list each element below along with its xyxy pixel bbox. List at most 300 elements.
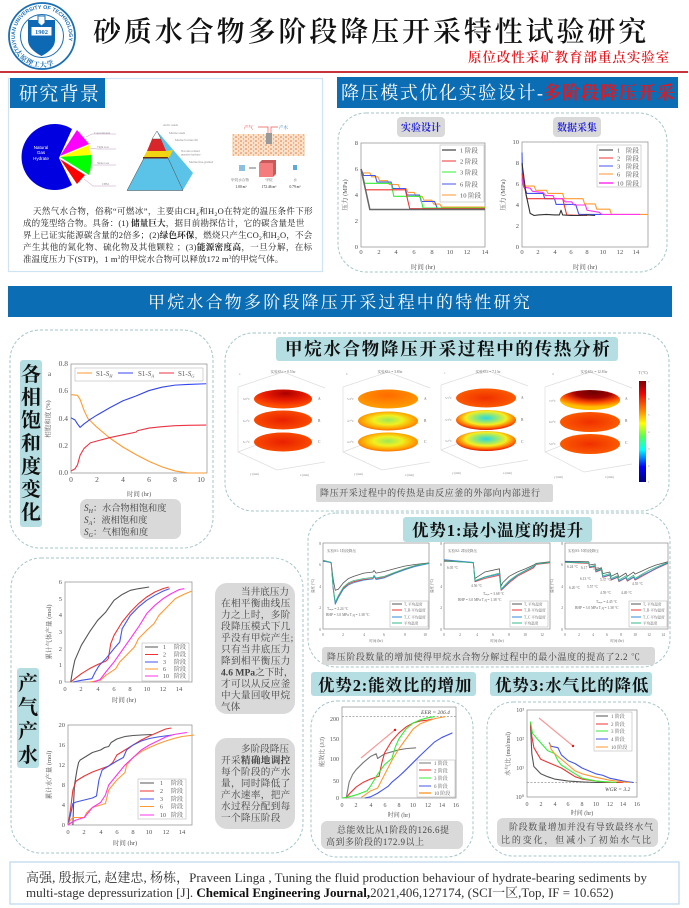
text block: background description: 成的笼型络合物。具备：(1) 储量巨大，据目前勘探估计，它的碳含量是世 (23, 218, 305, 229)
line chart: EER: 16 (453, 803, 459, 809)
legend: measured pressure: 阶段 (626, 162, 640, 170)
line chart: 1-stage temperature: 4 (319, 585, 321, 589)
legend: temperature a: Tₐ 平均温度 (404, 602, 423, 606)
legend: temperature a (390, 601, 428, 627)
legend: WGR: 1 阶段 (611, 713, 625, 720)
heat map d: 实验S3 t = 12.8 hr (581, 369, 608, 374)
line chart: 10-stage temperature: 12 (647, 633, 651, 637)
heading: research background: 研究背景 (19, 83, 100, 105)
line chart: WGR: 2 (540, 802, 542, 808)
heat map c: B (521, 418, 524, 422)
line chart: measured pressure: 4 (553, 249, 557, 256)
heat map c: 5.5°C (445, 396, 452, 400)
heat map b: x (mm) (405, 473, 414, 477)
color bar: temperature: 3 (648, 447, 650, 451)
line chart: EER: 14 (439, 803, 445, 809)
legend: EER (417, 760, 455, 797)
heat map a: 6.1°C (243, 440, 250, 444)
line chart: 10-stage temperature: 10 (633, 633, 637, 637)
note: gas production threshold: 只有当井底压力 (221, 644, 291, 656)
line chart: WGR: WGR = 3.2 (605, 787, 630, 793)
line chart: saturation vs time: 0.8 (59, 359, 68, 368)
line chart: 2-stage temperature (429, 542, 550, 643)
line chart: 2-stage temperature: 时间 (hr) (490, 638, 505, 643)
heat map c: 实验S3 t = 7.1 hr (475, 369, 501, 374)
note: gas production threshold: 降到相平衡压力 (221, 655, 291, 667)
legend: measured pressure: 3 (617, 164, 620, 170)
line chart: measured pressure: 10 (512, 139, 519, 146)
heat map a: 6.2°C (243, 419, 250, 423)
line chart: cumulative gas: 2 (59, 646, 62, 653)
panel: heat transfer analysis (225, 333, 669, 511)
line chart: 2-stage temperature: 2 (459, 633, 461, 637)
heat map c: 3.2°C (445, 439, 452, 443)
line chart: designed pressure: 14 (482, 249, 489, 256)
legend: temperature b: T_B 平均温度 (524, 608, 546, 612)
line chart: 2-stage temperature: 8 (440, 542, 442, 546)
heading: phase saturation change: 各 (21, 363, 41, 386)
heading: advantage 1: 优势1:最小温度的提升 (412, 520, 584, 540)
legend: gas (142, 643, 189, 681)
line chart: cumulative gas: 0 (59, 679, 62, 686)
legend: designed pressure (440, 145, 484, 202)
line chart: designed pressure: 0 (355, 244, 358, 251)
logo: Taiyuan University of Technology: TAIYUAN UNIVERSITY OF TECHNOLOGY (11, 5, 73, 52)
legend: EER: 3 阶段 (434, 775, 448, 782)
logo: Taiyuan University of Technology: 1902 (35, 29, 48, 36)
heading: depressurization design: 降压模式优化实验设计 (341, 83, 537, 103)
legend: water: 1 (160, 781, 163, 787)
caption: heat transfer (316, 484, 553, 502)
note: saturation symbols (80, 499, 181, 539)
line chart: designed pressure: 12 (464, 249, 470, 256)
heading: gas and water production: 水 (18, 744, 38, 767)
legend: gas: 3 (163, 660, 166, 666)
line chart: saturation vs time (43, 359, 207, 498)
heat map d: d (552, 372, 554, 376)
line chart: saturation vs time: 6 (147, 475, 151, 484)
pie chart: gas resources: Gas (37, 150, 46, 155)
line chart: 10-stage temperature: 6.20 °C (569, 586, 581, 590)
line chart: EER: 100 (330, 757, 339, 763)
heat map b: b (346, 372, 348, 376)
line chart: 10-stage temperature: 4 (592, 633, 594, 637)
line chart: 2-stage temperature: 6 (492, 633, 494, 637)
text block: background description: 产生其他的氮化物、硫化物及其他颗粒 ；(3)能源密度高，一旦分解，在标 (23, 242, 313, 253)
legend: gas: 阶段 (174, 665, 186, 673)
line chart: WGR: 10² (516, 737, 524, 743)
line chart: 10-stage temperature: 2 (561, 606, 563, 610)
heat map c: 3.3°C (445, 418, 452, 422)
color bar: temperature: T (°C) (638, 371, 648, 375)
legend: WGR: 4 阶段 (611, 736, 625, 743)
legend: temperature a: T_B 平均温度 (404, 608, 426, 612)
line chart: 10-stage temperature: 6.13 °C (580, 577, 592, 581)
legend: saturation (75, 368, 203, 381)
note: saturation symbols: G (89, 533, 94, 539)
diagram: hydrate dissociation volumes: 0.79 m³ (289, 185, 301, 189)
line chart: 10-stage temperature: 4 (561, 585, 563, 589)
heading: phase saturation change: 化 (21, 501, 41, 524)
line chart: 2-stage temperature: 2 (440, 606, 442, 610)
line chart: 1-stage temperature: 实验S1: 1阶段降压 (327, 548, 356, 553)
heat map c: y (mm) (452, 471, 461, 475)
line chart: WGR (504, 708, 640, 817)
diagram: hydrate dissociation volumes: 水 (293, 177, 297, 182)
line chart: EER: 8 (398, 803, 400, 809)
line chart: WGR: 10 (593, 802, 599, 808)
line chart: designed pressure: 4 (355, 192, 359, 199)
pie chart: gas resources: Shale Gas (97, 161, 110, 165)
line chart: 1-stage temperature: BHP = 3.0 MPa Tₑq = 1.38 °C (326, 613, 370, 617)
diagram: resource pyramid: Marine sands (169, 131, 186, 135)
line chart: saturation vs time: a (48, 370, 52, 378)
heading: gas and water production: 产 (18, 720, 38, 743)
diagram: hydrate dissociation volumes: 1.00 m³ (235, 185, 247, 189)
label: experimental design: 实验设计 (401, 121, 441, 134)
heading: gas and water production (17, 668, 39, 768)
line chart: EER: 50 (333, 779, 339, 785)
line chart: cumulative gas: 6 (112, 686, 116, 693)
line chart: EER: 2 (354, 803, 358, 809)
line chart: measured pressure: 12 (617, 249, 623, 256)
legend: designed pressure: 6 阶段 (460, 180, 478, 188)
diagram: resource pyramid: massive hydrate (181, 152, 201, 156)
heading: phase saturation change: 和 (21, 432, 41, 455)
line chart: 10-stage temperature: 8 (620, 633, 622, 637)
heading: phase saturation change: 相 (21, 386, 41, 409)
legend: water (138, 779, 186, 819)
line chart: 2-stage temperature: 12 (540, 633, 544, 637)
legend: temperature b: T_C 平均温度 (524, 614, 546, 620)
line chart: WGR: 8 (580, 802, 584, 808)
legend: gas: 1 (163, 645, 166, 651)
line chart: EER: 150 (330, 737, 339, 743)
line chart: 2-stage temperature: 实验S2: 2阶段降压 (448, 548, 477, 553)
line chart: 10-stage temperature: 6.17 (581, 566, 587, 570)
heading: gas and water production: 气 (18, 696, 38, 719)
heat map c: C (521, 440, 524, 444)
line chart: 10-stage temperature: 温度 (°C) (549, 578, 554, 593)
line chart: 1-stage temperature: 时间 (hr) (369, 638, 384, 643)
line chart: measured pressure: 8 (585, 249, 589, 256)
heat map c (441, 369, 528, 475)
diagram: resource pyramid: Marine fracture fill (175, 138, 198, 142)
pie chart: gas resources: Conventional (94, 131, 110, 135)
title: 砂质水合物多阶段降压开采特性试验研究 (93, 16, 649, 48)
color bar: temperature: 5 (648, 413, 650, 417)
legend: water: 3 (160, 797, 163, 803)
heat map d: 5.6°C (549, 442, 556, 446)
legend: measured pressure: 阶段 (626, 154, 640, 162)
text block: background description (23, 206, 313, 265)
note: saturation symbols: A (88, 521, 93, 527)
note: water production control: 水过程分配到每 (221, 800, 291, 812)
line chart: WGR: 水气比 (mol/mol) (504, 732, 512, 776)
note: saturation symbols: ：水合物相饱和度 (93, 502, 166, 513)
logo: Taiyuan University of Technology (8, 2, 76, 70)
banner: multi-stage characteristics (8, 286, 672, 317)
line chart: 2-stage temperature: 10 (523, 633, 527, 637)
line chart: cumulative gas: 14 (176, 686, 183, 693)
diagram: hydrate dissociation volumes: 产气 (244, 124, 253, 131)
heading: depressurization design: 多阶段降压开采 (543, 83, 675, 103)
note: water-gas ratio: 阶段数量增加并没有导致最终水气 (509, 821, 653, 832)
heat map c: A (521, 396, 524, 400)
line chart: cumulative water: 2 (82, 829, 86, 836)
legend: measured pressure: 2 (617, 156, 620, 162)
legend: gas: 阶段 (174, 650, 186, 658)
line chart: EER (318, 707, 459, 819)
line chart: EER: 0 (340, 803, 344, 809)
note: energy efficiency: 高到多阶段的172.9以上 (326, 836, 424, 847)
line chart: EER: 6 (384, 803, 386, 809)
heat map d: B (625, 419, 628, 423)
line chart: 10-stage temperature: Tₘᵢₙ = 4.45 °C (596, 600, 618, 604)
line chart: 1-stage temperature: 2 (342, 633, 344, 637)
panel: experimental design and data (338, 113, 667, 272)
line chart: 2-stage temperature: 4.56 °C (471, 584, 483, 588)
panel: gas and water production (11, 558, 303, 853)
color bar: temperature: 6 (648, 397, 650, 401)
diagram: hydrate dissociation volumes: 甲烷水合物 (231, 177, 249, 182)
line chart: cumulative water: 4 (99, 829, 103, 836)
line chart: designed pressure: 10 (447, 249, 453, 256)
line chart: 10-stage temperature: 6.24 °C (567, 565, 579, 569)
legend: saturation: G (191, 374, 195, 378)
line chart: EER: 能效比 (J/J) (318, 737, 326, 767)
line chart: cumulative water: 累计水产量 (mol) (44, 751, 53, 799)
heat map b (343, 369, 430, 477)
legend: WGR (594, 712, 632, 751)
line chart: WGR: 4 (554, 802, 556, 808)
line chart: 1-stage temperature: 6 (319, 563, 321, 567)
line chart: cumulative gas: 2 (79, 686, 83, 693)
line chart: cumulative gas: 6 (59, 579, 63, 586)
legend: EER: 10 阶段 (434, 790, 450, 797)
heat map c: x (mm) (503, 471, 512, 475)
line chart: 2-stage temperature: 8 (508, 633, 510, 637)
color bar: temperature: 1 (648, 480, 650, 484)
line chart: cumulative water: 14 (179, 829, 186, 836)
line chart: cumulative water: 时间 (hr) (113, 838, 137, 847)
diagram: hydrate dissociation volumes (231, 124, 305, 189)
legend: designed pressure: 2 阶段 (460, 156, 478, 166)
line chart: 10-stage temperature: 8 (561, 542, 563, 546)
line chart: saturation vs time: 2 (95, 475, 99, 484)
line chart: 1-stage temperature: 2 (319, 606, 321, 610)
legend: water: 阶段 (171, 795, 183, 803)
legend: saturation: S1-S (178, 370, 191, 378)
heat map a: y (mm) (250, 472, 259, 476)
note: water production control: 多阶段降压 (241, 743, 289, 755)
line chart: cumulative gas: 8 (128, 686, 132, 693)
heat map d: y (mm) (554, 475, 563, 479)
heading: phase saturation change: 变 (21, 477, 42, 501)
heading: advantage 1 (403, 517, 592, 542)
line chart: cumulative gas: 3 (59, 629, 62, 636)
heat map a: B (318, 419, 321, 423)
legend: designed pressure: 3 阶段 (460, 168, 478, 176)
line chart: 1-stage temperature: 0 (319, 628, 321, 632)
line chart: 1-stage temperature: 8 (404, 633, 406, 637)
line chart: measured pressure: 0 (516, 244, 519, 251)
subtitle: laboratory: 原位改性采矿教育部重点实验室 (468, 49, 670, 65)
text block: background description: 4 (196, 212, 199, 218)
note: gas production threshold: 才可以从反应釜 (221, 678, 291, 690)
legend: temperature c: T_B 平均温度 (643, 608, 665, 612)
line chart: 10-stage temperature: 实验S3: 10阶段降压 (568, 548, 599, 553)
heat map b: B (424, 419, 427, 423)
legend: temperature b (510, 601, 548, 627)
heat map a (238, 369, 325, 477)
line chart: cumulative water: 12 (58, 762, 65, 769)
line chart: saturation vs time: 0.6 (59, 386, 68, 395)
line chart: 1-stage temperature: 温度 (°C) (310, 578, 315, 593)
caption: minimum temperature: 降压阶段数量的增加使得甲烷水合物分解过程中的最小温度的提高了2.2 ℃ (327, 651, 640, 662)
legend: water: 阶段 (171, 811, 183, 819)
line chart: EER: 时间 (hr) (388, 811, 410, 819)
note: saturation symbols: H (88, 509, 94, 515)
legend: temperature a: 平均温度 (404, 620, 419, 626)
legend: temperature b: Tₐ 平均温度 (524, 602, 543, 606)
legend: water: 6 (160, 804, 163, 810)
note: energy efficiency (321, 821, 463, 849)
heat map b: 实验S3 t = 3.8 hr (377, 369, 403, 374)
legend: measured pressure (597, 145, 641, 188)
note: water-gas ratio: 比的变化，但减小了初始水气比 (501, 834, 651, 846)
line chart: cumulative gas: 1 (59, 662, 62, 669)
legend: temperature c: Tₐ 平均温度 (643, 602, 662, 606)
line chart: WGR: 10¹ (516, 766, 524, 772)
text block: background description: O，不会 (280, 230, 313, 241)
legend: temperature b: 平均温度 (524, 620, 539, 626)
legend: measured pressure: 10 (617, 180, 624, 188)
line chart: saturation vs time: 4 (121, 475, 125, 484)
diagram: hydrate dissociation volumes: 产水 (279, 124, 288, 131)
legend: EER: 2 阶段 (434, 768, 448, 774)
pie chart: gas resources: CBM (102, 182, 109, 186)
heat map b: C (424, 440, 427, 444)
text block: background description: 2 (277, 236, 280, 242)
legend: water: 10 (160, 813, 166, 819)
line chart: cumulative water: 8 (131, 829, 135, 836)
line chart: 2-stage temperature: 6 (440, 563, 442, 567)
caption: minimum temperature (322, 647, 655, 665)
legend: gas: 阶段 (174, 672, 186, 680)
color bar: temperature: 2 (648, 464, 650, 468)
line chart: designed pressure: 时间 (hr) (411, 262, 435, 271)
label: data collection: 数据采集 (557, 121, 597, 134)
note: water-gas ratio (497, 818, 658, 847)
line chart: EER: 200 (330, 717, 339, 723)
heat map d: 7.0°C (549, 399, 556, 403)
legend: temperature a: T_C 平均温度 (404, 614, 426, 620)
heat map b: A (424, 397, 427, 401)
line chart: cumulative water: 20 (58, 722, 65, 729)
legend: water: 2 (160, 789, 163, 795)
line chart: measured pressure: 时间 (hr) (573, 262, 597, 271)
line chart: 10-stage temperature: 6 (561, 563, 563, 567)
line chart: WGR: 10⁰ (516, 794, 525, 801)
heading: phase saturation change: 度 (21, 454, 41, 478)
line chart: 1-stage temperature: 4 (363, 633, 365, 637)
citation (10, 862, 679, 904)
line chart: cumulative water: 12 (163, 829, 169, 836)
panel: research background (8, 78, 322, 272)
line chart: 10-stage temperature: 2 (578, 633, 580, 637)
banner: multi-stage characteristics: 甲烷水合物多阶段降压开采过程中的特性研究 (148, 293, 532, 312)
line chart: cumulative gas: 10 (144, 686, 150, 693)
line chart: cumulative gas: 5 (59, 596, 62, 603)
note: water production control: 量，同时降低了 (221, 778, 291, 790)
line chart: cumulative water: 0 (66, 829, 70, 836)
panel: advantage 1 minimum temperature (308, 513, 670, 667)
line chart: 2-stage temperature: 4 (440, 585, 442, 589)
heat map d (545, 369, 632, 479)
line chart: cumulative water: 4 (62, 802, 66, 809)
heat map b: y (mm) (354, 472, 363, 476)
note: gas production threshold: 乎没有甲烷产生; (221, 632, 294, 644)
legend: WGR: 10 阶段 (611, 744, 627, 751)
diagram: hydrate dissociation volumes: 172.46 m³ (262, 185, 277, 189)
note: saturation symbols: S (84, 515, 93, 527)
legend: measured pressure: 阶段 (626, 178, 640, 188)
line chart: 10-stage temperature: 6 (606, 633, 608, 637)
line chart: cumulative water: 6 (115, 829, 119, 836)
line chart: EER: 12 (425, 803, 431, 809)
heat map a: A (318, 397, 321, 401)
diagram: hydrate dissociation volumes: 甲烷 (265, 177, 273, 182)
text block: background description: 3 (118, 255, 121, 261)
heat map a: 6.6°C (243, 397, 250, 401)
text block: background description: 和H (262, 230, 277, 240)
color bar: temperature: 4 (648, 430, 650, 434)
color bar: temperature: 7 (648, 380, 650, 384)
heading: heat transfer: 甲烷水合物降压开采过程中的传热分析 (285, 339, 611, 359)
legend: temperature c (629, 601, 667, 627)
heading: advantage 2: 优势2:能效比的增加 (318, 675, 472, 695)
heat map a: 实验S3 t = 0.5 hr (270, 369, 296, 374)
note: energy efficiency: 总能效比从1阶段的126.6提 (337, 824, 449, 835)
heat map b: 5.4°C (347, 397, 354, 401)
text block: background description: 的甲烷水合物可以释放172 m (120, 254, 229, 264)
line chart: saturation vs time: 10 (197, 475, 205, 484)
line chart: EER: 10 (410, 803, 416, 809)
heading: phase saturation change: 饱 (21, 409, 41, 432)
line chart: saturation vs time: 时间 (hr) (127, 489, 151, 498)
line chart: EER: EER = 206.4 (420, 709, 450, 716)
line chart: saturation vs time: 0 (69, 475, 73, 484)
note: saturation symbols: S (84, 503, 94, 515)
note: gas production threshold: 力之上时，多阶 (221, 609, 291, 621)
line chart: designed pressure: 6 (355, 166, 359, 173)
line chart: cumulative gas: 4 (96, 686, 100, 693)
legend: EER: 1 阶段 (434, 760, 448, 767)
line chart: cumulative gas: 12 (160, 686, 166, 693)
line chart: measured pressure: 14 (633, 249, 640, 256)
line chart: 1-stage temperature: 10 (423, 633, 427, 637)
text block: background description: 3 (229, 255, 232, 261)
line chart: 2-stage temperature: 4 (476, 633, 478, 637)
line chart: 10-stage temperature: 14 (661, 633, 665, 637)
pie chart: gas resources: Tight Gas (97, 145, 110, 149)
heat map a: x (mm) (300, 473, 309, 477)
heat map d: A (625, 397, 628, 401)
panel: water-gas ratio (487, 702, 669, 856)
legend: water: 阶段 (171, 787, 183, 795)
note: gas production threshold: 在相平衡曲线压 (221, 598, 291, 610)
